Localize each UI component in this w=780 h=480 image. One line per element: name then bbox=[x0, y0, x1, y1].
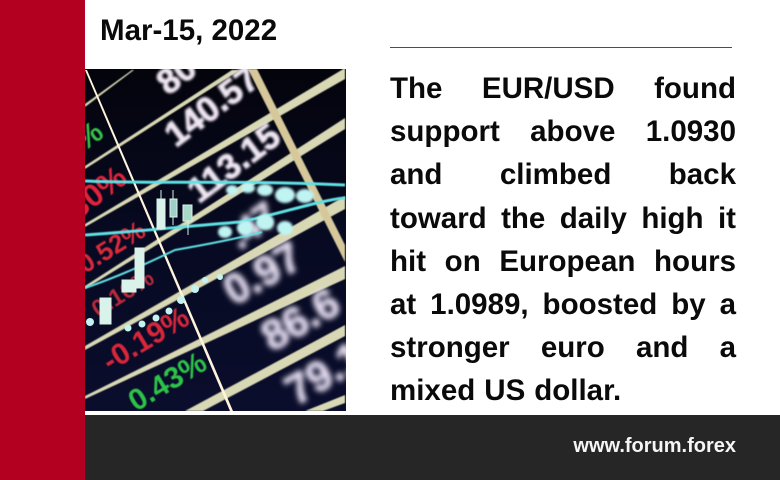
article paragraph: high bbox=[641, 202, 704, 235]
trading screen photo: .47 bbox=[220, 194, 285, 256]
article paragraph: found bbox=[654, 72, 736, 105]
article paragraph: a bbox=[720, 331, 736, 364]
cyan chart trace bbox=[85, 181, 345, 288]
thick blurred column line bbox=[248, 69, 345, 262]
article paragraph: 1.0930 bbox=[646, 115, 736, 148]
article paragraph: the bbox=[501, 202, 545, 235]
candlesticks bbox=[100, 190, 192, 324]
article paragraph: a bbox=[720, 288, 736, 321]
article paragraph: and bbox=[636, 331, 688, 364]
article paragraph: boosted bbox=[543, 288, 657, 321]
article paragraph: on bbox=[445, 245, 481, 278]
article paragraph: stronger bbox=[390, 331, 510, 364]
article paragraph: and bbox=[390, 158, 442, 191]
date heading: Mar-15, 2022 bbox=[100, 14, 277, 47]
white figures: 113.15 bbox=[180, 116, 288, 210]
article paragraph: above bbox=[530, 115, 615, 148]
article paragraph: hours bbox=[654, 245, 736, 278]
article paragraph: US bbox=[484, 374, 525, 407]
article paragraph bbox=[390, 72, 736, 407]
diagonal table rows bbox=[85, 68, 345, 411]
red and green percentages: -0.19% bbox=[97, 301, 195, 378]
dark footer bar bbox=[85, 415, 780, 480]
red and green percentages: 0.16% bbox=[87, 264, 159, 323]
white figures bbox=[149, 48, 288, 210]
article paragraph: EUR/USD bbox=[482, 72, 615, 105]
article paragraph: back bbox=[669, 158, 736, 191]
article paragraph: hit bbox=[390, 245, 426, 278]
article paragraph: support bbox=[390, 115, 500, 148]
red divider rule bbox=[390, 47, 732, 48]
article paragraph: mixed bbox=[390, 374, 475, 407]
thin column line bbox=[85, 70, 233, 411]
article paragraph: it bbox=[718, 202, 736, 235]
article paragraph: euro bbox=[541, 331, 605, 364]
cyan dots bbox=[86, 274, 223, 332]
article paragraph: climbed bbox=[500, 158, 611, 191]
article paragraph: 1.0989, bbox=[430, 288, 529, 321]
article paragraph: toward bbox=[390, 202, 487, 235]
red and green percentages bbox=[61, 115, 213, 418]
trading screen photo: 0.97 bbox=[215, 232, 309, 314]
article paragraph: by bbox=[671, 288, 706, 321]
article paragraph: European bbox=[499, 245, 635, 278]
article paragraph: dollar. bbox=[534, 374, 621, 407]
trading screen photo bbox=[85, 69, 346, 411]
red sidebar bbox=[0, 0, 85, 480]
trading screen photo: 86.6 bbox=[253, 278, 346, 360]
article paragraph: daily bbox=[560, 202, 627, 235]
article paragraph: The bbox=[390, 72, 442, 105]
website url: www.forum.forex bbox=[573, 435, 736, 457]
article paragraph: at bbox=[390, 288, 416, 321]
